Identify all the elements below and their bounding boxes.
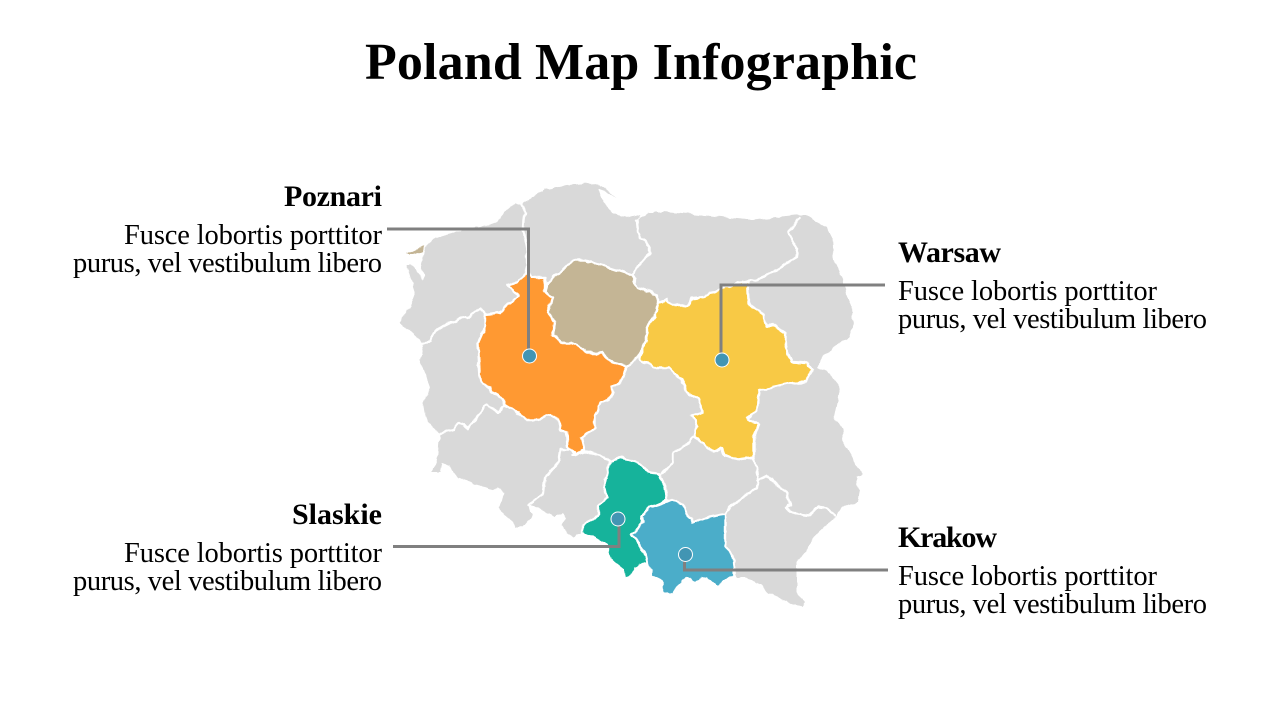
region: blue Krakow	[632, 500, 735, 595]
internal voivodeship borders	[422, 203, 835, 515]
heading: Krakow	[898, 521, 997, 554]
callout: Poznari	[73, 180, 536, 363]
connector line	[393, 525, 619, 546]
title: Poland Map Infographic	[365, 34, 917, 91]
description: purus, vel vestibulum libero	[898, 589, 1207, 620]
pin	[678, 548, 692, 562]
heading: Poznari	[284, 180, 382, 213]
pin	[522, 349, 536, 363]
description: Fusce lobortis porttitor	[124, 220, 382, 251]
region: yellow Warsaw	[640, 282, 813, 460]
description: Fusce lobortis porttitor	[898, 561, 1158, 592]
map of Poland	[400, 183, 862, 607]
description	[898, 561, 1207, 620]
description	[73, 220, 382, 279]
description	[898, 276, 1207, 335]
island: beige	[406, 245, 425, 254]
callout: Slaskie	[73, 498, 625, 597]
region: beige	[545, 260, 658, 367]
pin	[611, 512, 625, 526]
callout: Warsaw	[715, 236, 1207, 367]
description: Fusce lobortis porttitor	[898, 276, 1158, 307]
description: purus, vel vestibulum libero	[898, 304, 1207, 335]
region: orange Poznari	[478, 272, 627, 455]
heading: Slaskie	[292, 498, 382, 531]
description: purus, vel vestibulum libero	[73, 566, 382, 597]
description: Fusce lobortis porttitor	[124, 538, 382, 569]
connector line	[721, 285, 885, 355]
base country shape	[400, 183, 862, 607]
pin	[715, 353, 729, 367]
connector line	[684, 561, 888, 570]
description: purus, vel vestibulum libero	[73, 248, 382, 279]
callout: Krakow	[678, 521, 1207, 620]
connector line	[387, 229, 528, 351]
region: green Slaskie	[583, 458, 667, 577]
description	[73, 538, 382, 597]
heading: Warsaw	[898, 236, 1001, 269]
